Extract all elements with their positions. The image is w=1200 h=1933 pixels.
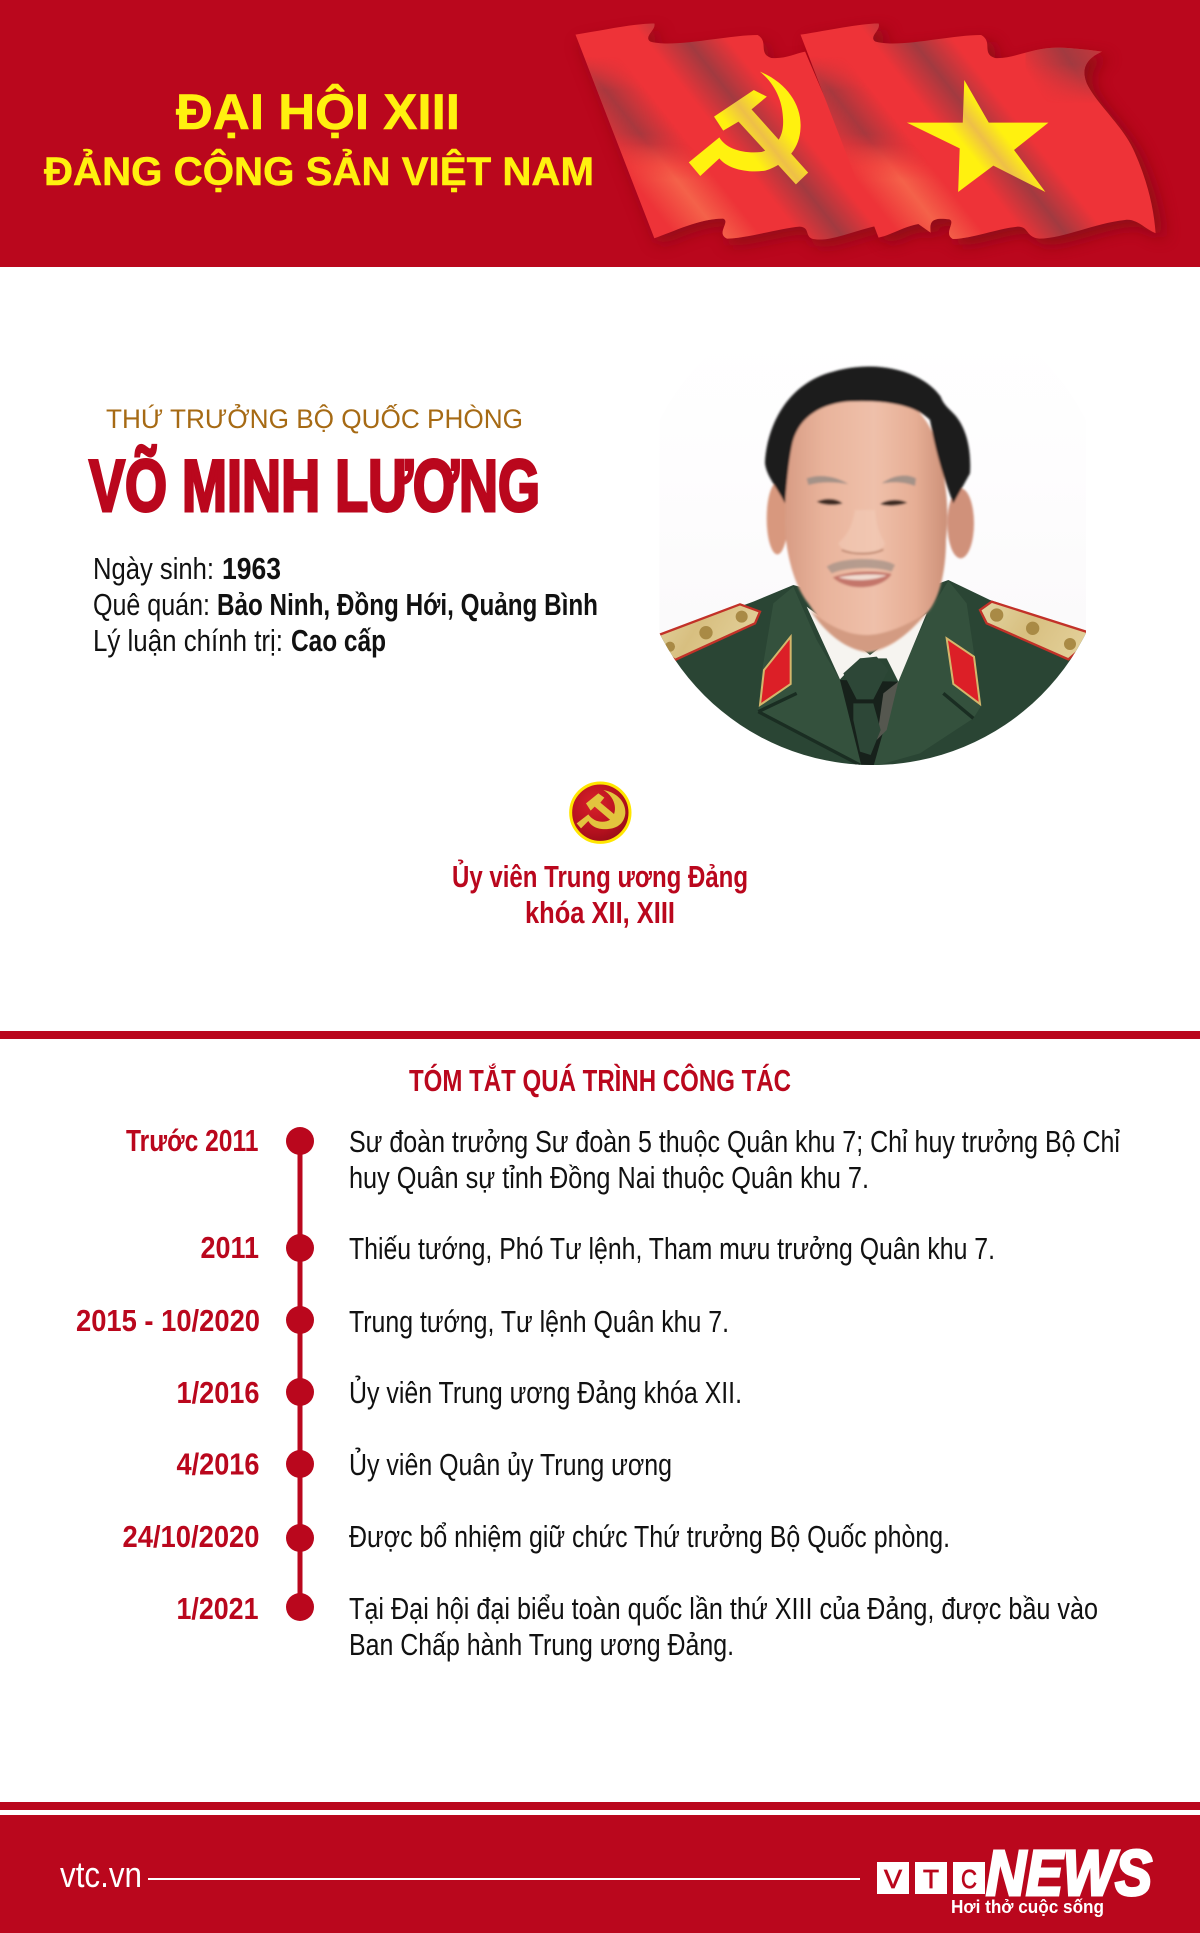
timeline dates: 2011 <box>200 1230 259 1265</box>
eyes <box>817 499 907 506</box>
timeline descriptions: huy Quân sự tỉnh Đồng Nai thuộc Quân khu 7. <box>349 1160 869 1195</box>
uniform body <box>653 580 1093 773</box>
personal information: Lý luận chính trị: <box>93 623 283 658</box>
timeline descriptions: Thiếu tướng, Phó Tư lệnh, Tham mưu trưởng Quân khu 7. <box>349 1231 995 1266</box>
logo: VTC News: T <box>923 1864 939 1894</box>
timeline dates <box>76 1123 260 1626</box>
job title: THỨ TRƯỞNG BỘ QUỐC PHÒNG <box>106 402 523 434</box>
face <box>785 388 947 652</box>
logo: VTC News: Hơi thở cuộc sống <box>951 1897 1104 1917</box>
Central Committee member text: Ủy viên Trung ương Đảng <box>452 858 748 894</box>
timeline descriptions: Ban Chấp hành Trung ương Đảng. <box>349 1627 734 1662</box>
title line 1: ĐẠI HỘI XIII <box>176 83 460 140</box>
title line 2: ĐẢNG CỘNG SẢN VIỆT NAM <box>44 148 594 194</box>
timeline descriptions: Được bổ nhiệm giữ chức Thứ trưởng Bộ Quốc phòng. <box>349 1519 950 1554</box>
Central Committee member text: khóa XII, XIII <box>525 895 675 930</box>
timeline dates: 2015 - 10/2020 <box>76 1303 260 1338</box>
footer band <box>0 1802 1200 1933</box>
ears <box>767 482 788 554</box>
site name: vtc.vn <box>60 1854 142 1895</box>
logo: VTC News: C <box>961 1864 977 1894</box>
icon: party badge <box>571 783 630 842</box>
logo: VTC News: V <box>884 1864 903 1894</box>
timeline heading: TÓM TẮT QUÁ TRÌNH CÔNG TÁC <box>409 1062 791 1098</box>
Central Committee member text <box>452 858 748 930</box>
timeline descriptions <box>349 1124 1120 1662</box>
icon: yellow star <box>907 80 1048 192</box>
person name: VÕ MINH LƯƠNG <box>89 446 540 527</box>
timeline dates: 4/2016 <box>176 1446 260 1482</box>
timeline dates: 1/2016 <box>176 1375 260 1410</box>
timeline dates: Trước 2011 <box>126 1123 258 1158</box>
mouth <box>833 572 892 587</box>
logo: VTC News <box>877 1837 1152 1917</box>
timeline descriptions: Trung tướng, Tư lệnh Quân khu 7. <box>349 1304 729 1339</box>
left flag: party flag <box>576 24 874 240</box>
timeline descriptions: Ủy viên Quân ủy Trung ương <box>349 1446 672 1482</box>
timeline descriptions: Ủy viên Trung ương Đảng khóa XII. <box>349 1374 742 1410</box>
right flag: national flag <box>800 24 1156 239</box>
portrait photo <box>660 364 1086 765</box>
personal information: 1963 <box>222 551 281 586</box>
icon: hammer and sickle <box>689 72 808 184</box>
shirt collar <box>807 607 927 682</box>
tie <box>843 656 882 755</box>
header band <box>0 0 1200 267</box>
timeline dates: 1/2021 <box>176 1591 258 1626</box>
personal information: Cao cấp <box>291 623 386 658</box>
moustache <box>827 559 895 573</box>
collar tabs <box>760 637 791 705</box>
personal information: Quê quán: <box>93 587 210 622</box>
personal information: Bảo Ninh, Đồng Hới, Quảng Bình <box>217 587 598 622</box>
hair <box>765 367 970 503</box>
personal information: Ngày sinh: <box>93 551 214 586</box>
eyebrows <box>807 476 916 486</box>
logo: VTC News: NEWS <box>986 1837 1152 1909</box>
icon: waving flags <box>566 20 1171 247</box>
timeline axis and dots <box>286 1127 314 1621</box>
head <box>765 367 974 652</box>
nose <box>840 511 884 552</box>
timeline dates: 24/10/2020 <box>122 1519 260 1554</box>
personal information <box>93 551 598 658</box>
epaulettes <box>650 604 760 660</box>
